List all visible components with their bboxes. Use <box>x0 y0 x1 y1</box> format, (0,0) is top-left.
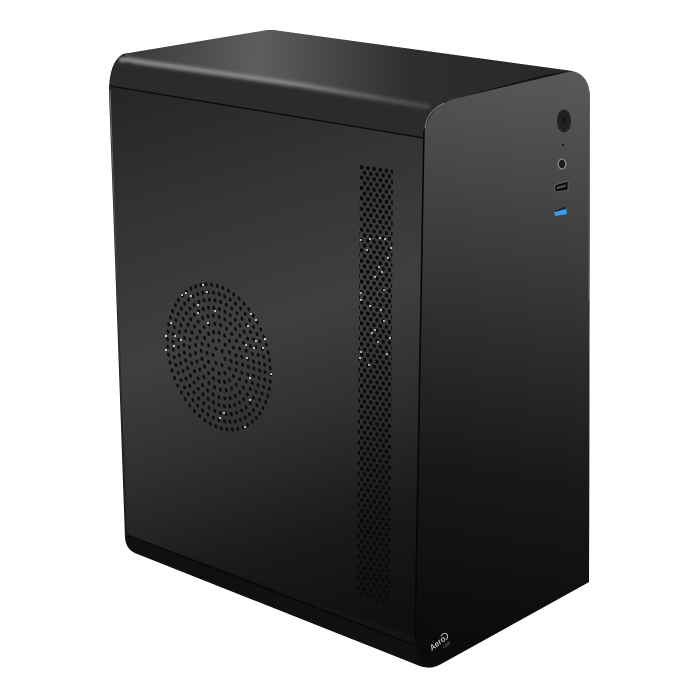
power button <box>558 159 566 169</box>
side panel bottom lip <box>127 536 423 667</box>
fan grille glints <box>165 284 272 428</box>
side fan grille <box>168 269 270 445</box>
front speaker grille <box>557 110 571 132</box>
side panel top seam <box>110 86 424 138</box>
usb 3.0 port <box>554 206 567 216</box>
brand suffix: cool <box>442 640 452 649</box>
logo mark <box>441 632 449 641</box>
power led <box>562 144 564 146</box>
front panel corner rim <box>425 103 444 128</box>
side vent <box>357 164 393 606</box>
front panel right rim <box>574 72 590 300</box>
brand logo <box>427 632 453 657</box>
left rim highlight <box>110 90 126 540</box>
top bevel of side panel <box>109 58 430 138</box>
side panel bottom seam <box>127 535 414 645</box>
usb 2.0 port <box>555 181 568 192</box>
front panel edge shadow <box>415 130 424 640</box>
front panel <box>415 71 590 668</box>
top face <box>123 30 572 116</box>
vent glints <box>359 237 392 366</box>
bevel highlight <box>119 59 430 107</box>
side panel <box>110 86 424 667</box>
brand name: Aero <box>427 634 448 653</box>
case silhouette <box>109 30 590 668</box>
